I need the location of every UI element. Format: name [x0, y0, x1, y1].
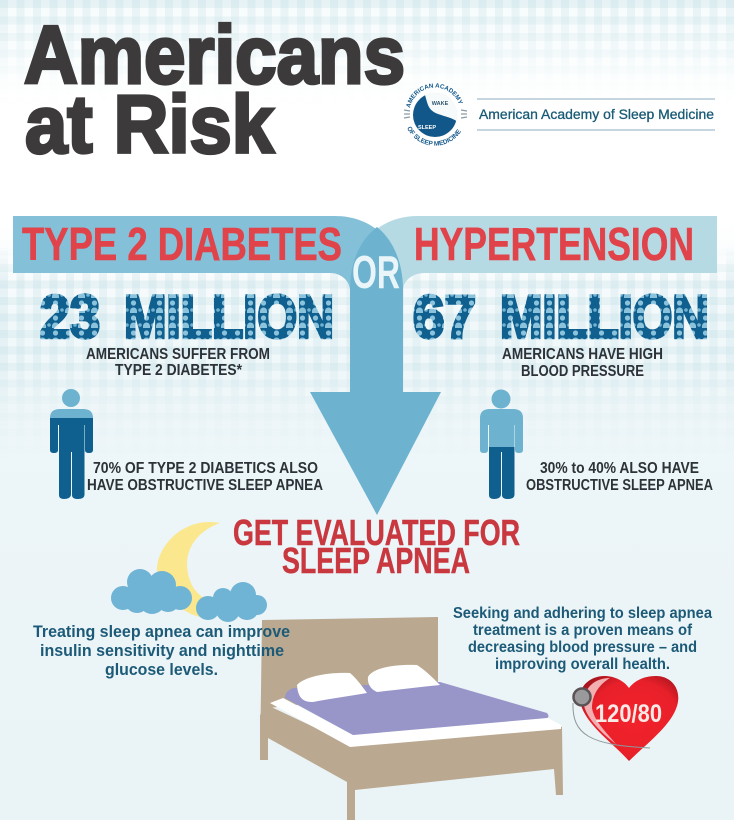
icon: heart with 120/80: 120/80: [595, 700, 662, 728]
caption: hypertension prevalence: [502, 346, 663, 380]
logo: American Academy of Sleep Medicine: WAKE: [432, 101, 449, 107]
caption: hypertension prevalence: AMERICANS HAVE HIGH: [502, 346, 663, 363]
stat: 67 million: 67: [413, 284, 476, 350]
text: diabetics with apnea: HAVE OBSTRUCTIVE SLEEP APNEA: [87, 477, 323, 494]
caption: diabetes prevalence: TYPE 2 DIABETES*: [115, 362, 243, 379]
caption: diabetes prevalence: AMERICANS SUFFER FROM: [86, 346, 270, 363]
arrow: central down arrow: [310, 227, 441, 515]
background gingham: [0, 0, 734, 400]
text: hypertensives with apnea: 30% to 40% ALSO HAVE: [540, 460, 699, 477]
illustration: bed: [260, 617, 563, 820]
blanket: [285, 682, 548, 735]
pillow right: [368, 665, 440, 692]
title: [24, 10, 405, 170]
text: diabetics with apnea: 70% OF TYPE 2 DIABETICS ALSO: [93, 460, 318, 477]
text: seeking treatment: Seeking and adhering to sleep apnea: [453, 605, 712, 622]
icon: crescent moon: [157, 522, 220, 617]
caption: diabetes prevalence: [86, 346, 270, 379]
heading: get evaluated: SLEEP APNEA: [282, 540, 470, 581]
logo wordmark with rules: American Academy of Sleep Medicine: [479, 107, 714, 122]
stat: 23 million: [40, 284, 334, 350]
caption: hypertension prevalence: BLOOD PRESSURE: [521, 363, 644, 380]
icon: cloud right: [196, 582, 267, 622]
text: treating sleep apnea: glucose levels.: [105, 661, 218, 679]
title: at Risk: [25, 79, 274, 170]
text: treating sleep apnea: insulin sensitivity and nighttime: [40, 642, 284, 660]
right banner: [350, 216, 717, 290]
stat: 23 million: MILLION: [124, 284, 334, 350]
pillow left: [297, 673, 367, 702]
text: seeking treatment: decreasing blood pressure – and: [468, 639, 697, 656]
or label: OR: [352, 246, 400, 298]
text: hypertensives with apnea: [526, 460, 713, 494]
heading: get evaluated: GET EVALUATED FOR: [233, 512, 520, 553]
logo: American Academy of Sleep Medicine: [404, 83, 468, 146]
logo: American Academy of Sleep Medicine: AMERICAN ACADEMY: [406, 83, 463, 108]
stat: 67 million: [413, 284, 709, 350]
text: seeking treatment: improving overall health.: [495, 656, 670, 673]
icon: heart with 120/80: [573, 676, 678, 761]
text: seeking treatment: treatment is a proven means of: [473, 622, 693, 639]
icon: cloud left: [111, 569, 192, 614]
heading: get evaluated: [233, 512, 520, 581]
text: treating sleep apnea: [33, 623, 290, 679]
icon: person partly filled: [480, 390, 523, 499]
headboard: [260, 617, 438, 760]
text: seeking treatment: [453, 605, 712, 673]
text: treating sleep apnea: Treating sleep apnea can improve: [33, 623, 290, 641]
mattress: [270, 698, 561, 747]
heading: type 2 diabetes: TYPE 2 DIABETES: [22, 218, 342, 270]
logo: American Academy of Sleep Medicine: OF SLEEP MEDICINE: [408, 126, 461, 146]
title: Americans: [24, 10, 405, 101]
text: diabetics with apnea: [87, 460, 323, 494]
bed frame: [260, 705, 563, 820]
stat: 23 million: 23: [40, 284, 100, 350]
left banner: [13, 216, 403, 290]
logo: American Academy of Sleep Medicine: SLEEP: [418, 125, 436, 131]
icon: person dark: [50, 389, 93, 499]
